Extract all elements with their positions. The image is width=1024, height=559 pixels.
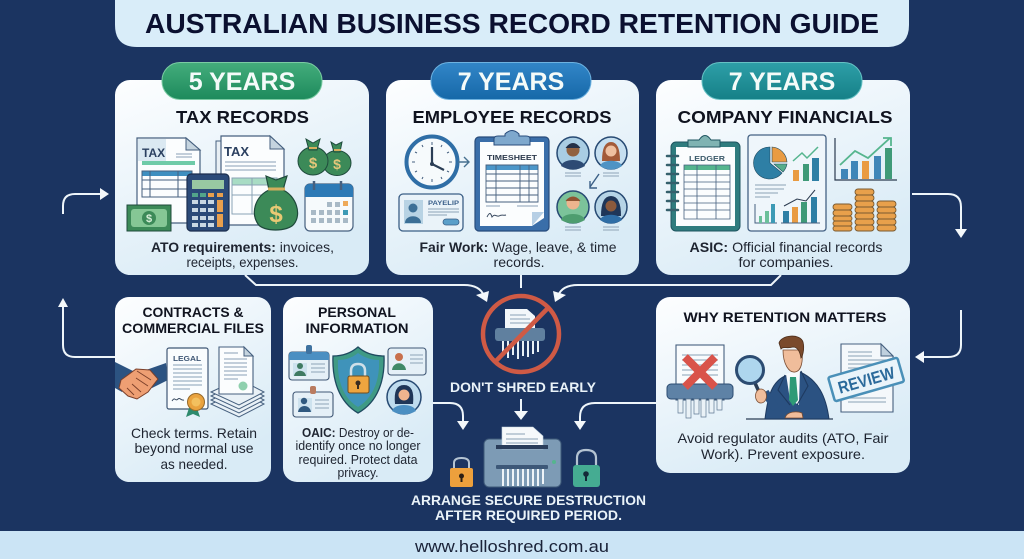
icon: small money bags: $ bbox=[333, 156, 341, 172]
text: personal information description: privacy. bbox=[338, 466, 378, 480]
arrow: company financials to shredder bbox=[553, 275, 781, 302]
icon: timesheet clipboard bbox=[475, 130, 549, 231]
icon: coin stacks bbox=[833, 189, 896, 231]
icon: tax form left: TAX bbox=[142, 146, 165, 160]
icon: shredder with red x bbox=[667, 345, 733, 418]
icon: growth bar chart bbox=[835, 138, 897, 180]
text: why retention description: Work). Prevent exposure. bbox=[701, 446, 865, 462]
icon: small money bags bbox=[298, 139, 351, 176]
pill: 5 years: 5 YEARS bbox=[189, 68, 295, 96]
icon: timesheet clipboard: TIMESHEET bbox=[487, 153, 537, 162]
heading: why retention matters: WHY RETENTION MATTERS bbox=[684, 309, 886, 325]
icon: document with review stamp bbox=[828, 344, 904, 412]
icon: cash note bbox=[127, 205, 171, 231]
icon: legal document with seal: LEGAL bbox=[173, 354, 201, 363]
icon: employee avatars bbox=[557, 137, 627, 230]
arrow: personal information to destruction bbox=[433, 403, 469, 430]
text: personal information description: required. Protect data bbox=[298, 453, 418, 467]
title banner: AUSTRALIAN BUSINESS RECORD RETENTION GUIDE bbox=[145, 8, 879, 39]
arrow: middle left up bbox=[58, 298, 115, 357]
text: company financials description: for companies. bbox=[738, 254, 834, 270]
pill: 5 years bbox=[162, 62, 322, 100]
icon: financial report bbox=[748, 135, 826, 231]
footer bar: www.helloshred.com.au bbox=[414, 538, 609, 556]
icon: tax form right bbox=[216, 136, 284, 225]
pill: 7 years teal: 7 YEARS bbox=[729, 68, 835, 96]
panel: employee records bbox=[386, 62, 639, 275]
label: arrange secure destruction: ARRANGE SECURE DESTRUCTION bbox=[411, 492, 646, 508]
icon: ledger clipboard: LEDGER bbox=[689, 154, 726, 163]
pill: 7 years teal bbox=[702, 62, 862, 100]
icon: large money bag: $ bbox=[269, 201, 283, 228]
icon: orange padlock bbox=[450, 458, 473, 487]
icon: document with review stamp: REVIEW bbox=[836, 363, 898, 398]
text: contracts description: Check terms. Retain bbox=[131, 425, 257, 441]
icon: shredder with paper bbox=[484, 427, 561, 487]
heading: contracts and commercial files: CONTRACTS & bbox=[142, 304, 244, 320]
icon: shield with padlock bbox=[333, 347, 384, 413]
arrow: top left loop bbox=[63, 188, 109, 214]
footer bar bbox=[0, 531, 1024, 559]
arrow: top right down bbox=[912, 194, 967, 238]
label: arrange secure destruction: AFTER REQUIRED PERIOD. bbox=[435, 507, 622, 523]
icon: calculator bbox=[187, 174, 229, 231]
arrow: employee records connector bbox=[520, 275, 522, 288]
text: personal information description: identify once no longer bbox=[296, 439, 420, 453]
text: employee records description: records. bbox=[494, 254, 544, 270]
panel: tax records bbox=[115, 62, 369, 275]
panel: personal information bbox=[283, 297, 433, 482]
icon: large money bag bbox=[254, 176, 298, 230]
icon: legal document with seal bbox=[167, 348, 208, 417]
text: why retention description: Avoid regulator audits (ATO, Fair bbox=[678, 430, 889, 446]
heading: contracts and commercial files: COMMERCIAL FILES bbox=[122, 320, 264, 336]
icon: payslip card bbox=[399, 194, 463, 231]
text: personal information description: OAIC: Destroy or de- bbox=[302, 426, 418, 440]
heading: personal information: PERSONAL bbox=[318, 304, 396, 320]
text: company financials description: ASIC: Official financial records bbox=[690, 239, 880, 255]
panel: company financials bbox=[656, 62, 910, 275]
pill: 7 years blue bbox=[431, 62, 591, 100]
heading: company financials: COMPANY FINANCIALS bbox=[678, 107, 892, 127]
panel: why retention matters bbox=[656, 297, 910, 473]
icon: tax form left bbox=[137, 138, 200, 223]
text: employee records description: Fair Work: Wage, leave, & time bbox=[420, 239, 617, 255]
arrow: middle right left bbox=[915, 310, 961, 363]
text: tax records description: ATO requirements: invoices, bbox=[151, 239, 334, 255]
arrow: don't shred to destruction bbox=[514, 399, 528, 420]
icon: calendar bbox=[305, 181, 353, 231]
icon: clock with arrow bbox=[406, 136, 469, 188]
heading: tax records: TAX RECORDS bbox=[176, 107, 309, 127]
icon: id badges bbox=[289, 345, 426, 417]
icon: stack of papers bbox=[211, 347, 264, 417]
heading: employee records: EMPLOYEE RECORDS bbox=[412, 107, 612, 127]
text: contracts description: as needed. bbox=[160, 456, 228, 472]
icon: payslip card: PAYELIP bbox=[428, 200, 460, 207]
icon: tax form right: TAX bbox=[224, 144, 249, 159]
panel: contracts and commercial files bbox=[115, 297, 271, 482]
heading: personal information: INFORMATION bbox=[306, 320, 408, 336]
text: contracts description: beyond normal use bbox=[134, 440, 254, 456]
icon: no shredding symbol bbox=[483, 296, 559, 372]
icon: cash note: $ bbox=[146, 213, 152, 225]
icon: businessman with magnifier bbox=[736, 336, 833, 419]
pill: 7 years blue: 7 YEARS bbox=[458, 68, 564, 96]
icon: green padlock bbox=[573, 450, 600, 487]
arrow: why retention to destruction bbox=[574, 403, 656, 430]
title banner bbox=[115, 0, 909, 47]
icon: small money bags: $ bbox=[309, 155, 318, 172]
icon: handshake bbox=[115, 362, 168, 399]
text: tax records description: receipts, expenses. bbox=[186, 254, 298, 270]
arrow: tax records to shredder bbox=[245, 275, 489, 302]
icon: ledger clipboard bbox=[667, 136, 740, 231]
icon: person avatar bbox=[387, 380, 421, 414]
label: don't shred early: DON'T SHRED EARLY bbox=[450, 379, 597, 395]
